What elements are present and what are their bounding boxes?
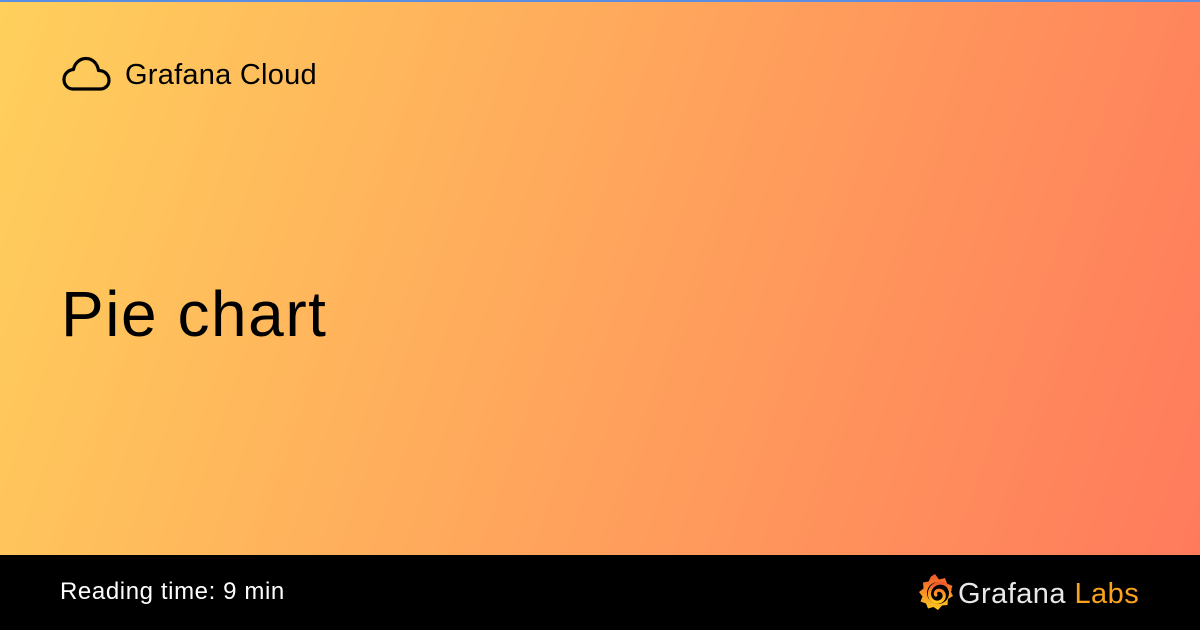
icon: cloud (62, 56, 111, 91)
logo wordmark: Grafana Labs (958, 578, 1139, 610)
panel: footer bar (0, 555, 1200, 630)
text: reading time: Reading time: 9 min (60, 578, 285, 605)
label: product name: Grafana Cloud (125, 59, 317, 91)
title: Pie chart (61, 278, 328, 350)
icon: Grafana logo (919, 574, 953, 610)
top accent bar (0, 0, 1200, 2)
